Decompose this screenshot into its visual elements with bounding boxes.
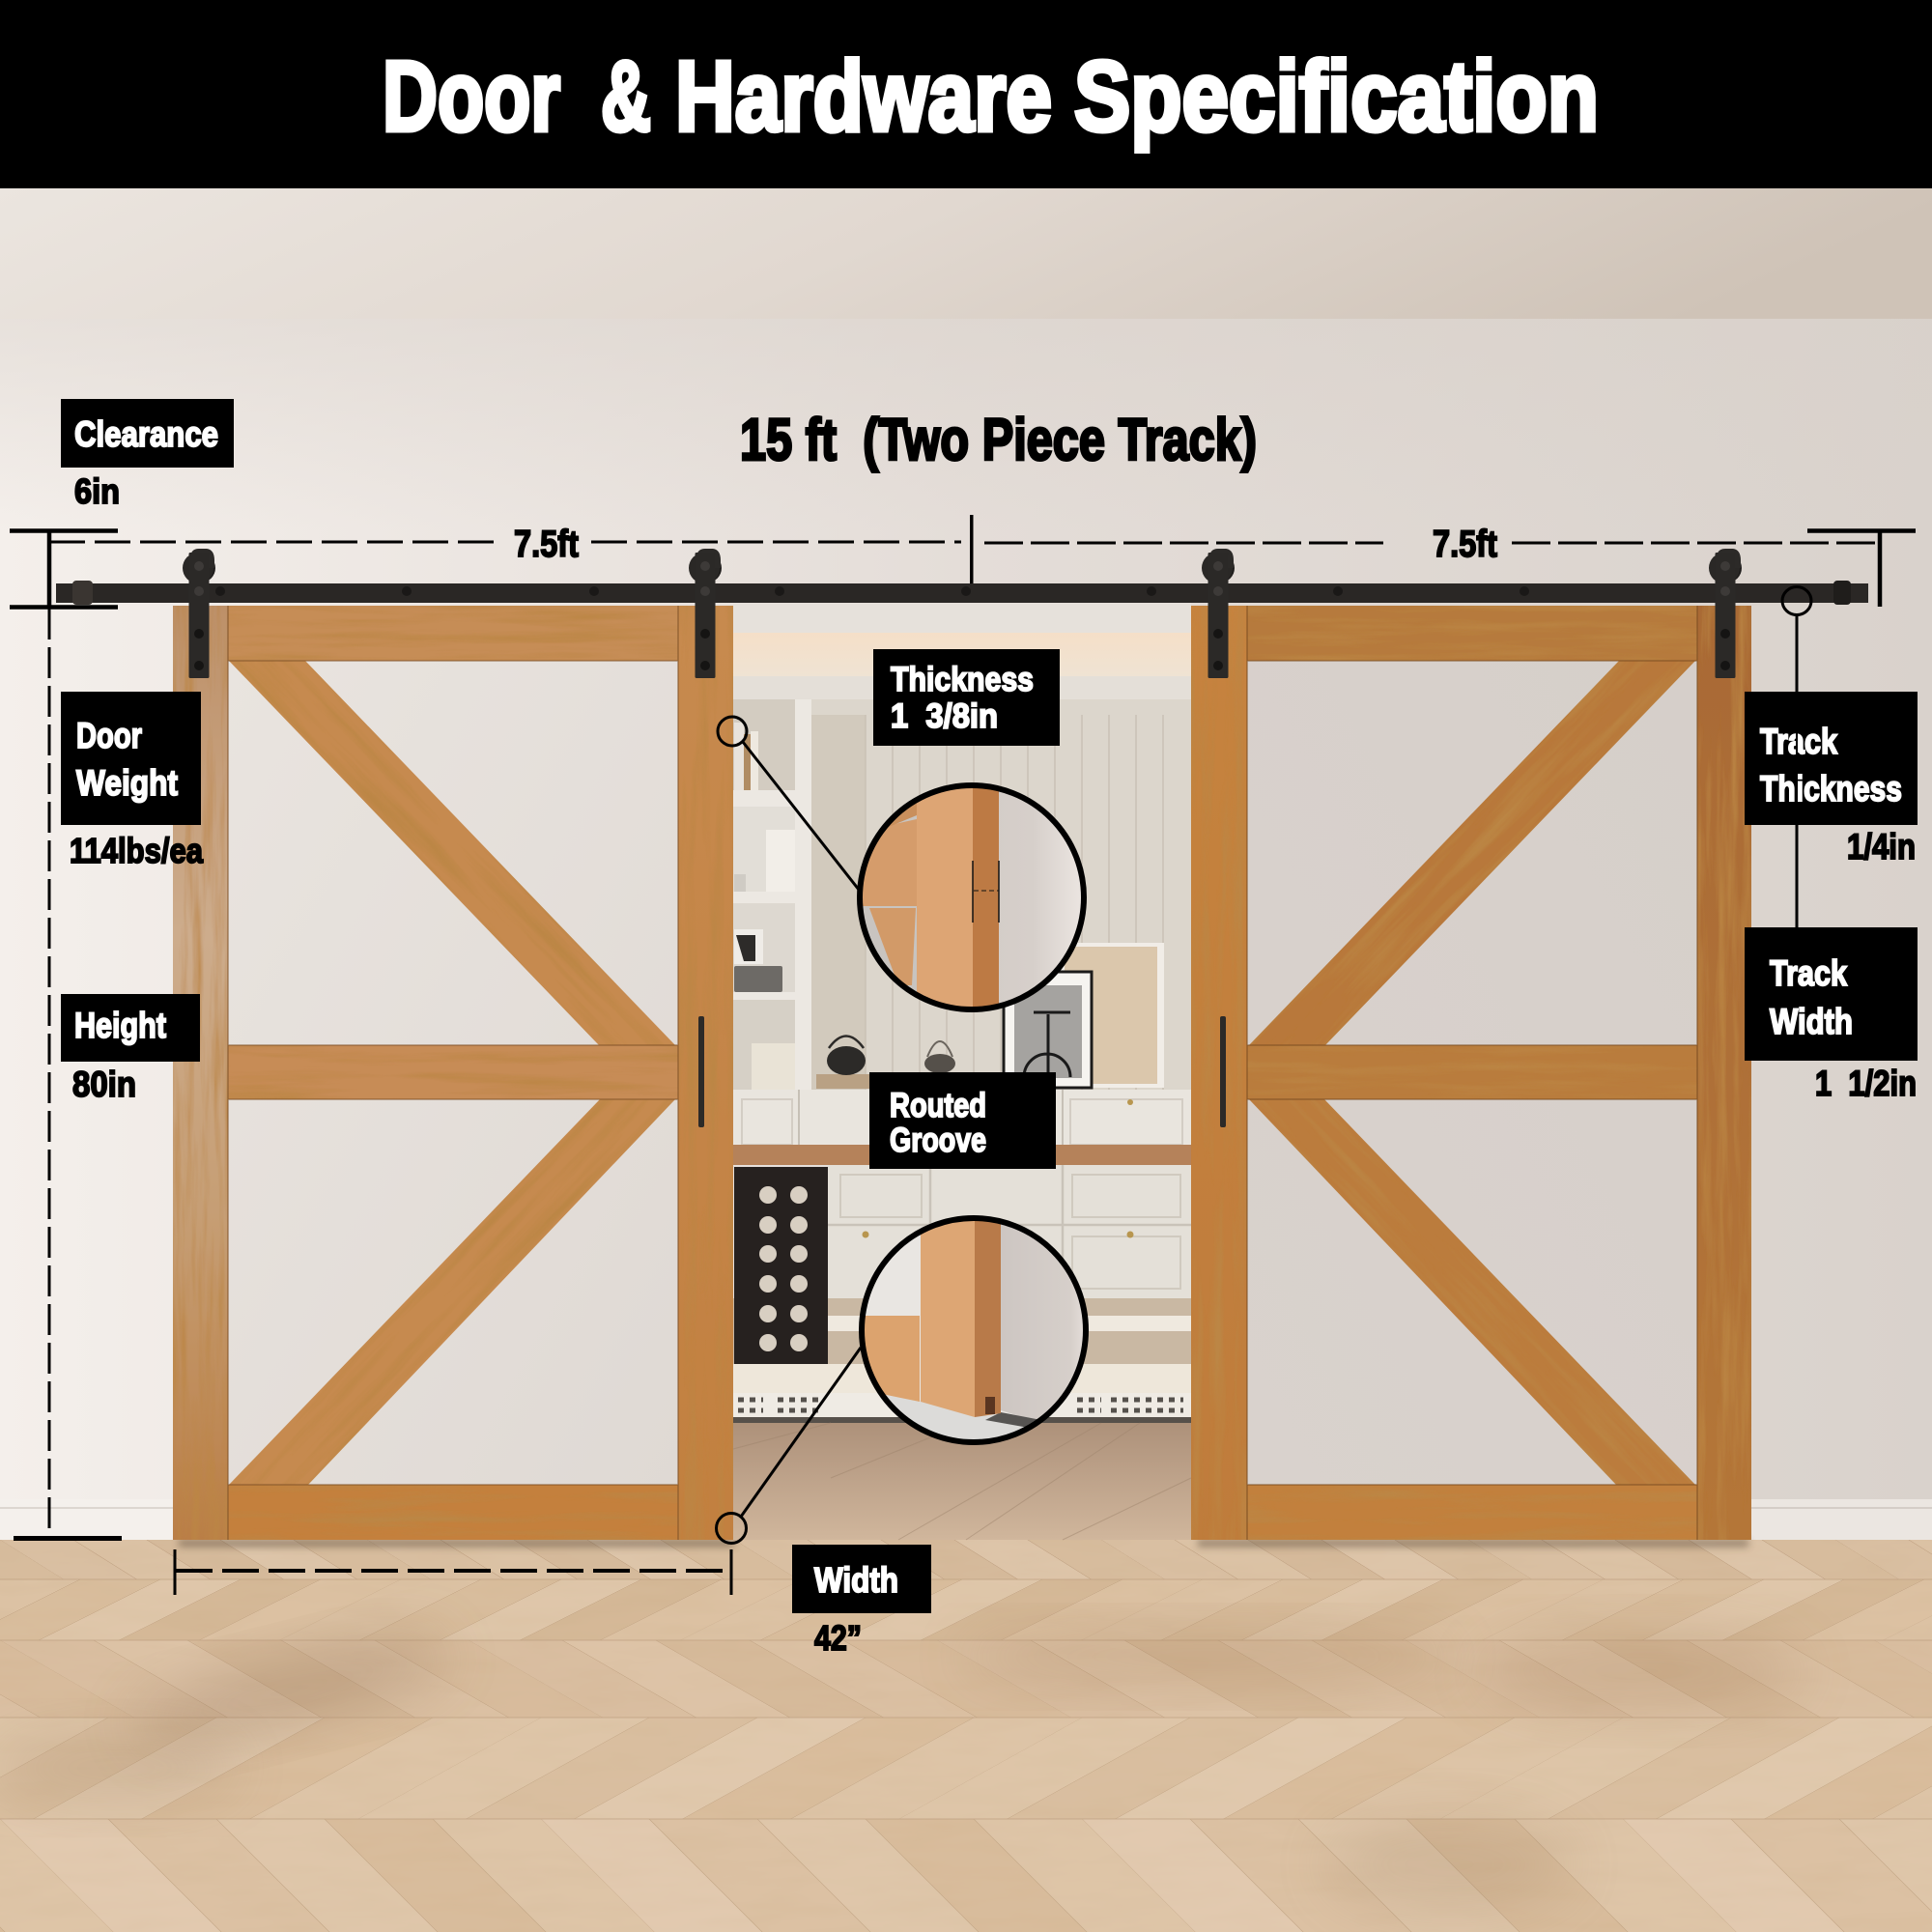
label: width: 42” (814, 1618, 862, 1658)
soffit and warm cove light (733, 603, 1191, 699)
left door inner stile (678, 606, 733, 1540)
lower cabinets (828, 1165, 1191, 1298)
label: clearance: Clearance (74, 414, 218, 454)
label: track width (1745, 927, 1918, 1103)
clearance bracket right (1807, 530, 1916, 607)
perforated black panel (734, 1167, 828, 1364)
label: thickness: Thickness (891, 661, 1034, 698)
baseboard right (1750, 1499, 1932, 1540)
baseboard left (0, 1499, 174, 1540)
label: height: 80in (72, 1065, 136, 1104)
leaning art print (1061, 943, 1164, 1088)
interior floor (733, 1423, 1191, 1540)
right door outer stile (1697, 606, 1751, 1540)
track length heading: 15 ft (Two Piece Track) (740, 407, 1257, 472)
label: track thickness: 1/4in (1847, 827, 1916, 867)
left door joint lines (228, 606, 678, 1540)
distant floor and stripes (733, 1298, 1191, 1423)
patterned rug (733, 1393, 1191, 1423)
left door bottom rail (228, 1485, 678, 1540)
label: routed groove (869, 1072, 1056, 1169)
right door lower brace (1249, 1099, 1695, 1485)
header band (0, 0, 1932, 188)
width dimension line (175, 1549, 731, 1595)
right door glass panel (1247, 661, 1697, 1485)
title: Specification (1074, 41, 1599, 152)
hanger 3 (1202, 549, 1235, 678)
back wall (0, 319, 1932, 1540)
interior room seen through the doorway (733, 603, 1191, 1540)
right door inner stile (1191, 606, 1247, 1540)
label: door weight: 114lbs/ea (70, 831, 204, 870)
herringbone floor (0, 1540, 1932, 1932)
label: track thickness: Thickness (1760, 769, 1902, 809)
horizontal dimension: left 7.5ft: 7.5ft (514, 524, 579, 565)
thickness callout leader (718, 717, 859, 890)
horizontal dimension: right 7.5ft: 7.5ft (1433, 524, 1497, 565)
left door lower brace (229, 1099, 675, 1485)
label: width: Width (814, 1560, 898, 1600)
bookshelf (733, 699, 804, 1090)
label: routed groove: Groove (890, 1122, 986, 1159)
label: track thickness: Track (1760, 722, 1837, 761)
label: door weight: Weight (76, 763, 178, 803)
right door upper brace (1249, 661, 1695, 1045)
clearance bracket left (10, 530, 118, 607)
sliding track (56, 581, 1868, 605)
title: Hardware (675, 41, 1052, 152)
label: height (61, 994, 200, 1104)
label: width (792, 1545, 931, 1658)
groove callout leader (717, 1348, 861, 1544)
label: door weight: Door (76, 716, 142, 755)
label: track thickness (1745, 692, 1918, 867)
right door handle (1220, 1016, 1226, 1127)
label: clearance: 6in (74, 471, 120, 511)
title: Door (383, 41, 560, 152)
label: routed groove: Routed (890, 1087, 986, 1124)
left door outer stile (173, 606, 228, 1540)
title: & (601, 41, 651, 152)
label: clearance (61, 399, 234, 511)
height dimension line (14, 609, 122, 1541)
left door upper brace (229, 661, 675, 1045)
hanger 1 (183, 549, 215, 678)
label: height: Height (74, 1006, 166, 1045)
right door joint lines (1247, 606, 1697, 1540)
magnifier: door thickness (855, 781, 1092, 1017)
kettles and tray (816, 1036, 955, 1089)
centre tick (970, 515, 974, 583)
right door middle rail (1247, 1045, 1697, 1099)
hanger 4 (1709, 549, 1742, 678)
label: thickness: 1 3/8in (891, 697, 998, 735)
left door handle (698, 1016, 704, 1127)
right door top rail (1247, 606, 1697, 661)
framed bicycle photo (1004, 972, 1092, 1088)
magnifier: routed groove (858, 1214, 1094, 1451)
ceiling band (0, 188, 1932, 319)
wainscot back wall (733, 699, 1191, 1090)
right barn door (1191, 606, 1751, 1540)
label: track width: Width (1770, 1002, 1853, 1041)
left door middle rail (228, 1045, 678, 1099)
right door bottom rail (1247, 1485, 1697, 1540)
left door glass panel (228, 661, 678, 1485)
title (383, 41, 1599, 152)
label: track width: Track (1770, 953, 1847, 993)
label: door weight (61, 692, 204, 870)
hanger 2 (689, 549, 722, 678)
wood desk top (733, 1145, 1191, 1165)
left barn door (173, 606, 733, 1540)
label: thickness (873, 649, 1060, 746)
left door top rail (228, 606, 678, 661)
upper cabinets (733, 1090, 1191, 1145)
track callout leader (1782, 587, 1811, 927)
